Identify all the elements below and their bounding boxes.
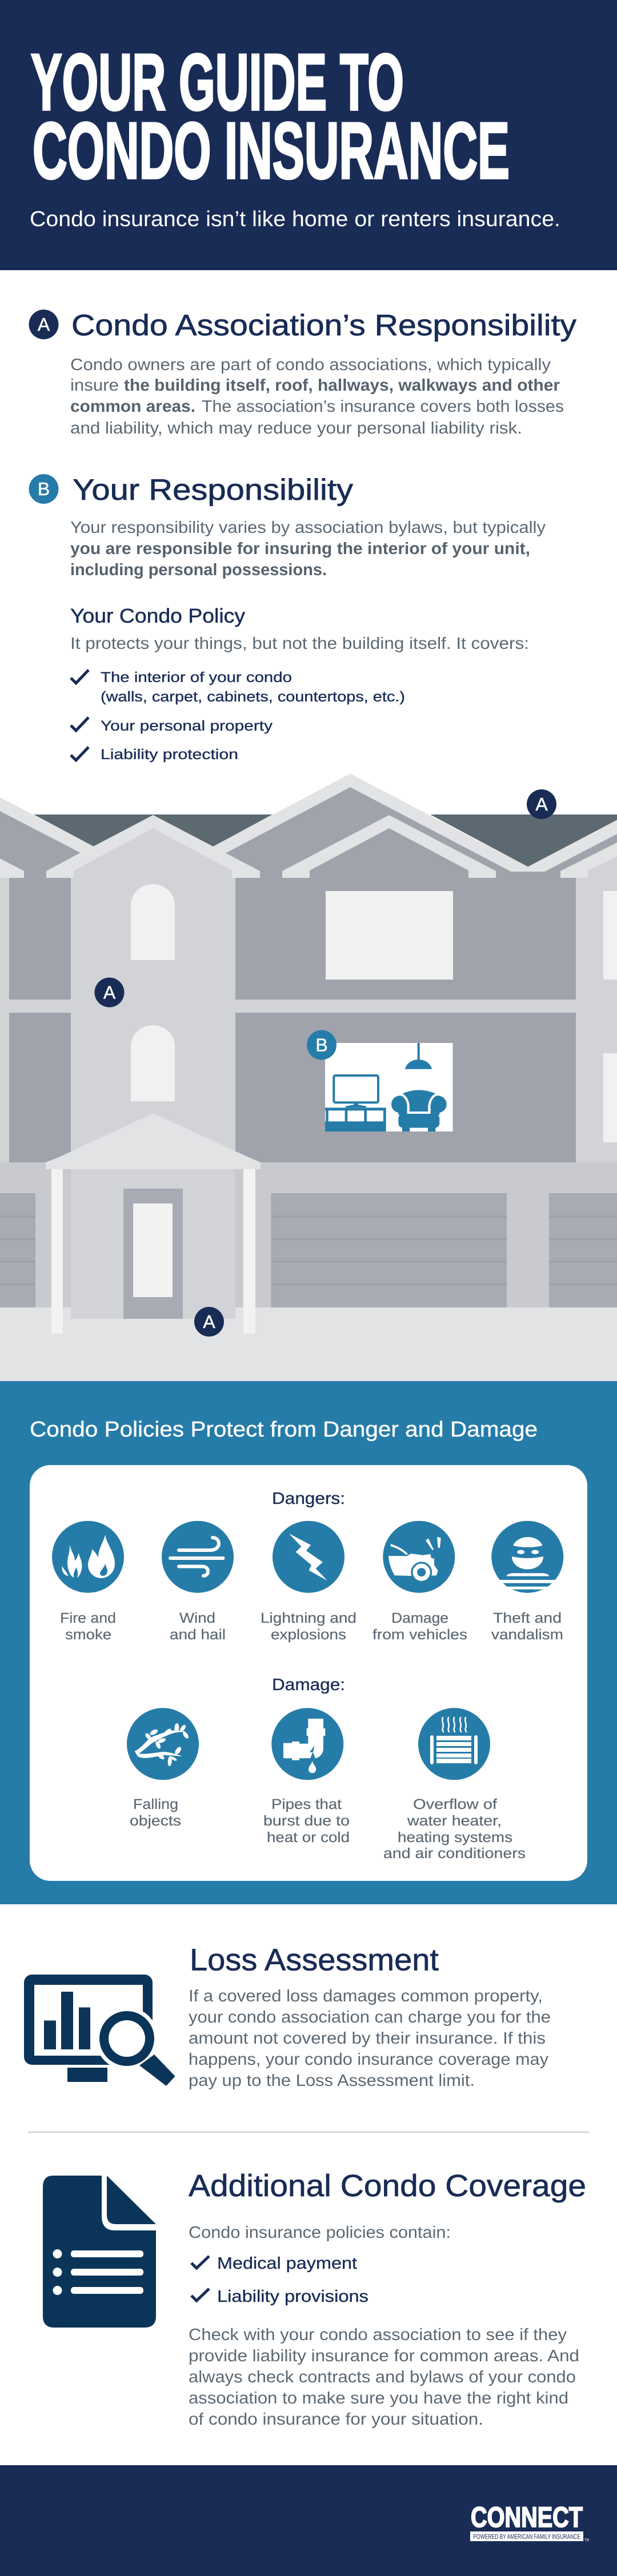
panel: your responsibility [29, 474, 546, 763]
label: fire and smoke: Fire and [60, 1610, 116, 1626]
heading: dangers: Dangers: [272, 1490, 345, 1508]
label: theft and vandalism [491, 1610, 563, 1643]
label: lightning and explosions: explosions [271, 1627, 346, 1643]
subtitle: Condo insurance isn’t like home or renters insurance. [30, 207, 560, 231]
label: damage from vehicles: from vehicles [372, 1627, 467, 1643]
label: theft and vandalism: Theft and [493, 1610, 562, 1626]
heading: condo policies protect: Condo Policies Protect from Danger and Damage [30, 1418, 538, 1442]
icon: damaged car [383, 1521, 455, 1593]
interior window with furniture [325, 1043, 452, 1131]
label: overflow [383, 1796, 526, 1861]
text block: association paragraph [70, 356, 564, 438]
checklist: policy coverage: (walls, carpet, cabinets, countertops, etc.) [101, 689, 405, 705]
icon: burst pipes [271, 1708, 343, 1780]
subheading: your condo policy: Your Condo Policy [70, 605, 246, 627]
label: wind and hail [170, 1610, 226, 1643]
text block: responsibility paragraph: Your responsibility varies by association bylaws, but typically [70, 519, 546, 537]
panel: condo association's responsibility [29, 309, 576, 438]
icon: pendant lamp [405, 1043, 432, 1069]
arched windows [131, 884, 175, 1101]
icon: wind and hail [162, 1521, 234, 1593]
icon: thief [491, 1521, 563, 1593]
roof trim [0, 773, 617, 878]
badge A: wall [95, 978, 125, 1008]
text block: check with association: Check with your condo association to see if they [189, 2326, 567, 2344]
text block: check with association [189, 2326, 579, 2429]
label: pipes that burst [263, 1796, 350, 1845]
dark roof [34, 814, 617, 867]
checklist: policy coverage [71, 669, 405, 763]
porch roof [46, 1113, 261, 1169]
icon: television and cabinet [325, 1076, 386, 1131]
walls [0, 878, 617, 1162]
label: damage from vehicles: Damage [391, 1610, 448, 1626]
text block: association paragraph: Condo owners are part of condo associations, which typically [70, 356, 551, 374]
badge A [29, 310, 58, 339]
label: theft and vandalism: vandalism [491, 1627, 563, 1643]
text block: policy intro: It protects your things, but not the building itself. It covers: [70, 635, 529, 653]
text block: check with association: association to make sure you have the right kind [189, 2389, 568, 2408]
text block: loss assessment: amount not covered by their insurance. If this [189, 2029, 546, 2048]
text block: association paragraph: insure [70, 376, 119, 395]
icon: document [43, 2176, 156, 2328]
right side windows [603, 891, 617, 1142]
text block: loss assessment [189, 1987, 551, 2090]
text block: check with association: of condo insurance for your situation. [189, 2410, 483, 2429]
badge B: B [38, 479, 50, 499]
text block: association paragraph: common areas. [70, 398, 195, 416]
icon: heater overflow [418, 1708, 490, 1780]
tower roof trim [46, 815, 260, 878]
label: damage from vehicles [372, 1610, 467, 1643]
label: fire and smoke [60, 1610, 116, 1643]
checklist: policy coverage: The interior of your condo [101, 669, 292, 685]
checklist: policy coverage: Your personal property [101, 718, 273, 734]
label: overflow: and air conditioners [383, 1845, 526, 1861]
text block: responsibility paragraph: including personal possessions. [70, 561, 327, 579]
heading: damage: Damage: [272, 1676, 345, 1694]
heading: loss assessment: Loss Assessment [190, 1943, 439, 1977]
badge B: interior [307, 1030, 336, 1060]
label: overflow: water heater, [407, 1813, 502, 1829]
label: pipes that burst: Pipes that [271, 1796, 342, 1812]
label: lightning and explosions [261, 1610, 356, 1643]
panel: header [0, 0, 617, 270]
logo: connect [470, 2501, 589, 2542]
badge A: wall: A [103, 982, 116, 1003]
tower [71, 828, 235, 1319]
label: falling objects: objects [130, 1813, 181, 1829]
label: overflow: heating systems [398, 1829, 512, 1845]
badge A: A [38, 314, 50, 335]
panel: dangers and damage [0, 1381, 617, 1904]
heading: additional condo coverage: Additional Condo Coverage [189, 2169, 586, 2203]
text block: check with association: provide liability insurance for common areas. And [189, 2347, 579, 2365]
garage doors [0, 1193, 617, 1307]
icon: monitor with magnifier [24, 1975, 175, 2086]
checklist: contained provisions: Liability provisions [217, 2288, 368, 2306]
badge B [29, 474, 58, 504]
white card [30, 1465, 587, 1881]
icon: fire and smoke [52, 1521, 124, 1593]
text block: loss assessment: pay up to the Loss Assessment limit. [189, 2072, 475, 2090]
upper big window [326, 891, 453, 980]
heading: your responsibility: Your Responsibility [73, 474, 353, 507]
label: lightning and explosions: Lightning and [261, 1610, 356, 1626]
text block: loss assessment: happens, your condo insurance coverage may [189, 2051, 549, 2069]
text block: loss assessment: If a covered loss damages common property, [189, 1987, 543, 2005]
logo: connect: CONNECT [471, 2501, 583, 2533]
label: wind and hail: and hail [170, 1627, 226, 1643]
front door [123, 1189, 183, 1319]
logo: connect: TM [584, 2538, 589, 2542]
garage level [0, 1162, 617, 1381]
panel: loss assessment [24, 1943, 551, 2090]
panel: additional condo coverage [43, 2169, 586, 2429]
text block: association paragraph: The association’s insurance covers both losses [202, 398, 564, 416]
text block: policies contain: Condo insurance policies contain: [189, 2224, 451, 2242]
panel: footer [0, 2465, 617, 2576]
porch columns [51, 1169, 255, 1334]
heading: condo association's responsibility: Condo Association’s Responsibility [71, 309, 576, 342]
text block: association paragraph: and liability, which may reduce your personal liability risk. [70, 419, 522, 438]
badge A: roof [527, 789, 556, 819]
illustration: condo building [0, 773, 617, 1381]
label: falling objects: Falling [133, 1796, 178, 1812]
text block: association paragraph: the building itself, roof, hallways, walkways and other [124, 376, 560, 395]
icon: falling branch [127, 1708, 199, 1780]
label: wind and hail: Wind [179, 1610, 215, 1626]
label: pipes that burst: burst due to [263, 1813, 350, 1829]
text block: responsibility paragraph: you are responsible for insuring the interior of your unit, [70, 540, 530, 558]
badge A: roof: A [535, 794, 548, 814]
text block: responsibility paragraph [70, 519, 546, 579]
label: pipes that burst: heat or cold [267, 1829, 350, 1845]
text block: check with association: always check contracts and bylaws of your condo [189, 2368, 576, 2386]
label: falling objects [130, 1796, 181, 1829]
icon: lightning [273, 1521, 344, 1593]
badge A: walkway [194, 1307, 224, 1337]
text block: loss assessment: your condo association can charge you for the [189, 2008, 551, 2027]
label: fire and smoke: smoke [65, 1627, 111, 1643]
checklist: contained provisions: Medical payment [217, 2254, 357, 2273]
label: overflow: Overflow of [413, 1796, 497, 1812]
checklist: contained provisions [191, 2254, 368, 2306]
icon: armchair [391, 1090, 447, 1131]
checklist: policy coverage: Liability protection [101, 747, 238, 763]
title [31, 37, 510, 195]
badge B: interior: B [315, 1035, 328, 1056]
badge A: walkway: A [203, 1311, 215, 1332]
